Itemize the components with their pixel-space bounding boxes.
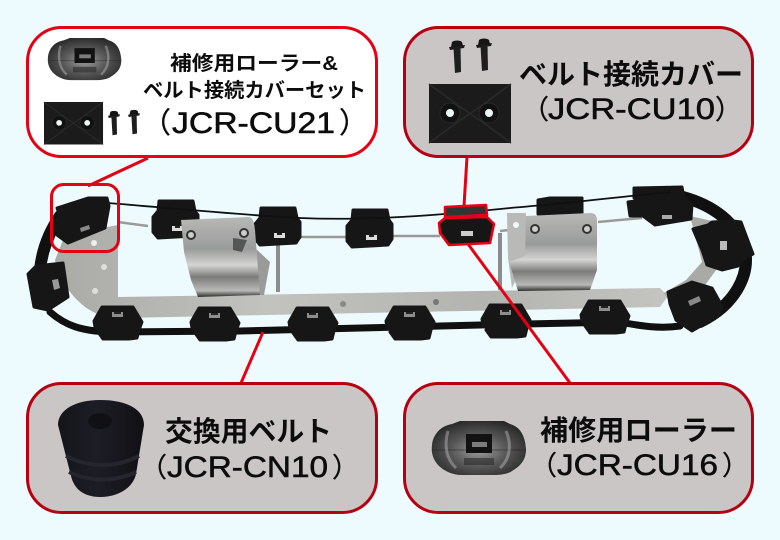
panel: repair roller (404, 384, 752, 512)
icon: bolt (449, 40, 465, 73)
heading: replacement belt: 交換用ベルト (165, 416, 332, 447)
part number: ） (722, 451, 749, 481)
part number: JCR-CU21 (172, 107, 335, 140)
panel: roller and belt cover set (28, 28, 376, 156)
icon: second bolt (476, 38, 492, 71)
icon: cover plate (44, 102, 103, 144)
aluminium frame (55, 216, 722, 318)
icon: roller (48, 38, 121, 80)
part number (142, 107, 368, 140)
part number: JCR-CN10 (167, 451, 328, 484)
part number (140, 451, 359, 484)
mounting bracket left (181, 217, 270, 297)
part number: JCR-CU10 (548, 93, 715, 126)
thin top belt (108, 192, 670, 219)
icon: roller (432, 421, 526, 475)
heading: belt cover: ベルト接続カバー (519, 59, 743, 90)
heading: repair roller: 補修用ローラー (540, 415, 737, 446)
highlight: end roller and cover (52, 184, 118, 252)
part number: （ (142, 108, 171, 140)
mounting bracket right (507, 213, 597, 291)
part number: ） (332, 453, 359, 483)
icon: cover plate (429, 84, 511, 143)
part number: （ (140, 453, 167, 483)
part number: （ (522, 95, 549, 125)
right stud (498, 233, 502, 290)
leader line: set callout (88, 158, 148, 186)
part number (522, 93, 742, 126)
bottom rollers (94, 301, 629, 340)
part number: ） (339, 108, 368, 140)
heading: set name (143, 52, 366, 102)
left stud (276, 245, 280, 292)
part number: （ (530, 451, 557, 481)
part number (530, 449, 749, 482)
belt behind frame (40, 197, 746, 332)
panel: belt cover (404, 28, 752, 156)
icon: belt roll (58, 400, 144, 497)
heading: set name: ベルト接続カバーセット (143, 79, 366, 102)
icon: second bolt (128, 110, 140, 134)
part number: JCR-CU16 (557, 449, 718, 482)
panel: replacement belt (28, 384, 376, 512)
belt conveyor assembly photo (28, 187, 753, 340)
highlight: roller and cover (439, 205, 494, 245)
icon: bolt (108, 111, 120, 135)
top rollers (153, 187, 692, 247)
end rollers (28, 221, 753, 331)
heading: set name: 補修用ローラー& (170, 52, 338, 75)
leader line: roller callout (468, 244, 570, 383)
leader line: belt callout (241, 332, 263, 383)
part number: ） (715, 95, 742, 125)
leader line: belt cover callout (464, 157, 467, 206)
